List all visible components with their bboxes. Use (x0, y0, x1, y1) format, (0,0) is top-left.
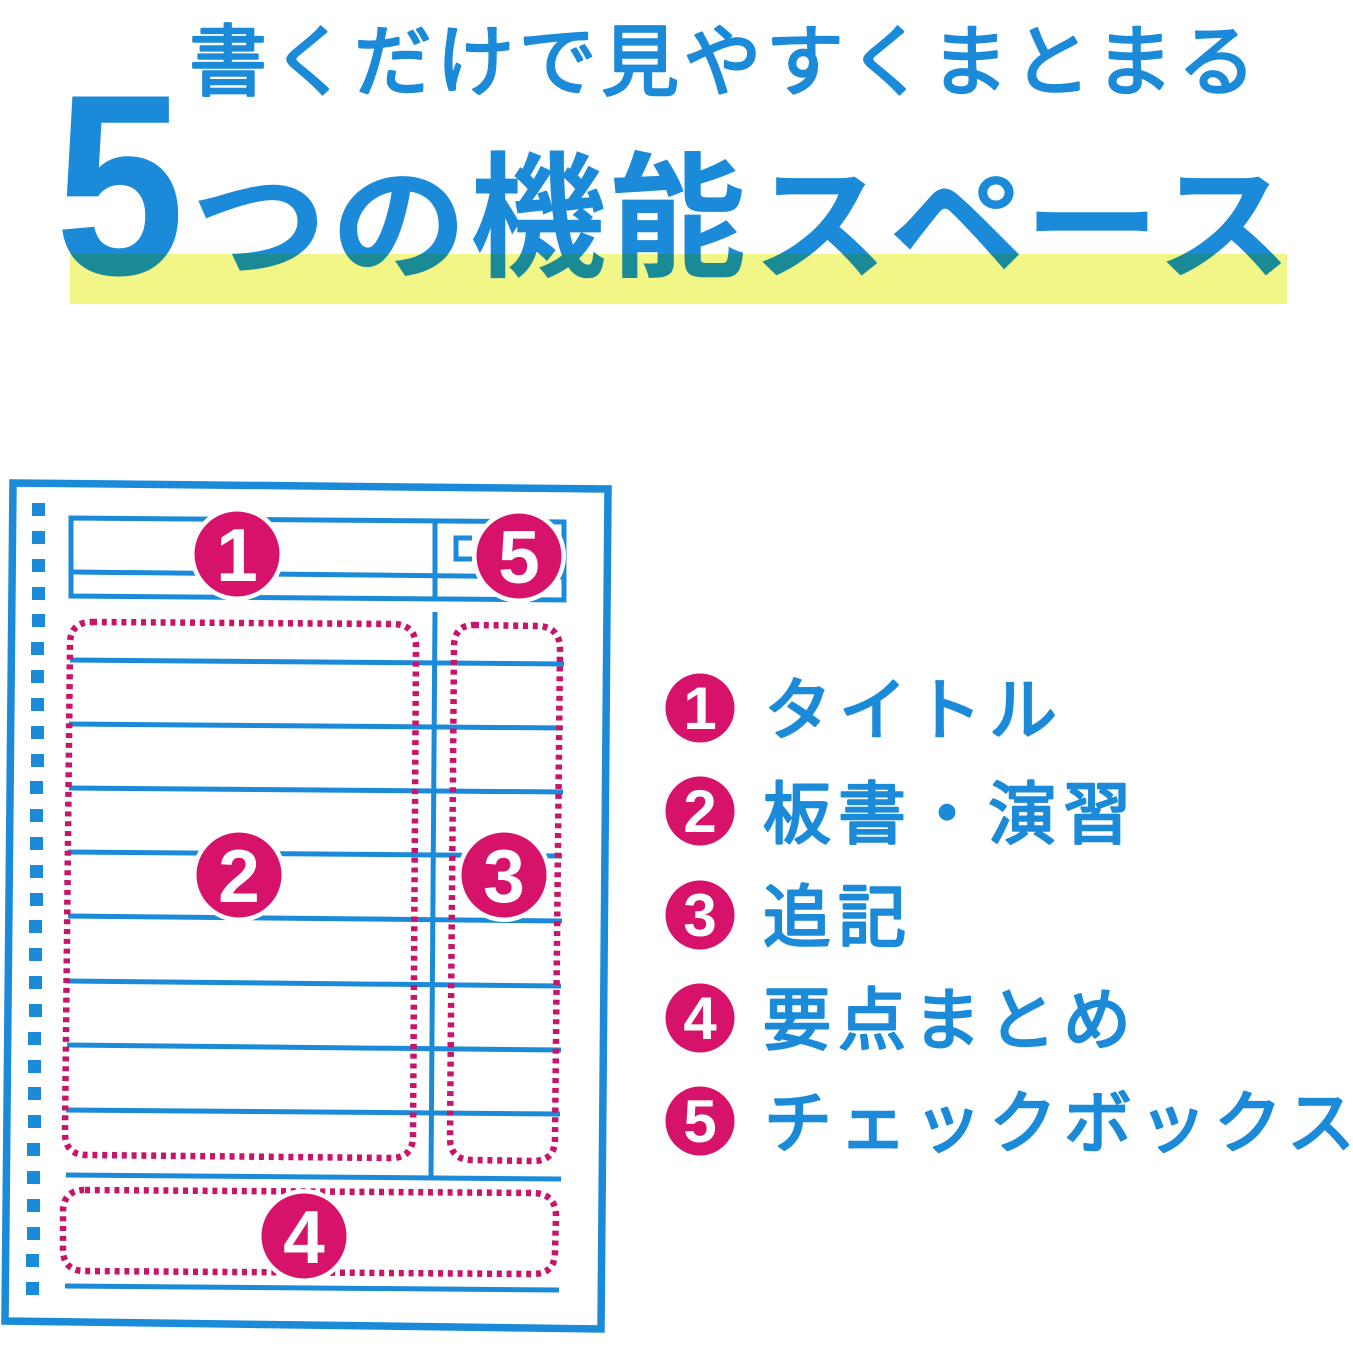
legend item 1: 1 (683, 675, 717, 742)
legend item 2: 板書・演習 (763, 777, 1138, 853)
legend item 4: 要点まとめ (763, 983, 1138, 1059)
legend item 1: タイトル (764, 673, 1064, 749)
dotted area 2: notes and exercises (65, 622, 416, 1158)
yellow highlight band (70, 254, 1287, 304)
panel: notebook page diagram (5, 483, 608, 1329)
marker 4 (257, 1189, 351, 1283)
legend item 4: 4 (683, 985, 717, 1052)
heading: 5つの機能スペース (55, 41, 1292, 330)
heading kana: つの: つの (191, 155, 467, 297)
ruled lines (65, 612, 564, 1290)
dotted area 3: additions (450, 625, 560, 1161)
subtitle: 書くだけで見やすくまとまる (189, 18, 1260, 106)
legend item 2: 2 (683, 778, 717, 845)
marker 5 (472, 509, 566, 603)
marker 5: 5 (498, 515, 540, 599)
title row box (71, 518, 564, 600)
marker 2 (192, 828, 286, 922)
marker 3: 3 (483, 834, 525, 918)
legend item 3: 3 (683, 882, 717, 949)
page frame (5, 483, 608, 1329)
marker 3 (457, 828, 551, 922)
big numeral 5: 5 (55, 41, 185, 330)
binding holes (26, 503, 45, 1295)
heading kanji: 機能: 機能 (470, 143, 746, 295)
legend item 3 (666, 880, 913, 956)
marker 1: 1 (216, 513, 258, 597)
marker 4: 4 (283, 1195, 325, 1279)
legend (666, 673, 1353, 1162)
legend item 5: チェックボックス (764, 1086, 1353, 1162)
dotted area 4: key summary (63, 1190, 556, 1274)
legend item 3: 追記 (763, 880, 913, 956)
legend item 5: 5 (683, 1088, 717, 1155)
marker 2: 2 (218, 834, 260, 918)
heading kana: スペース: スペース (752, 155, 1292, 297)
marker 1 (190, 507, 284, 601)
